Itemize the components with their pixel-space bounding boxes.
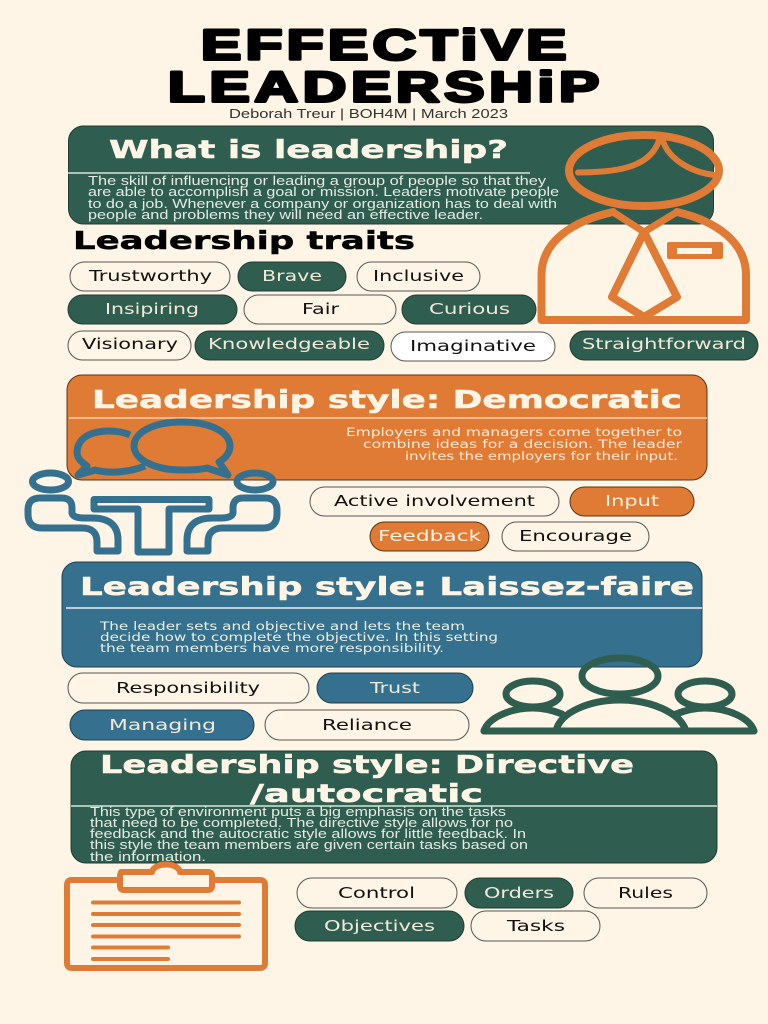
pill: Straightforward: Straightforward (582, 335, 746, 353)
text: democratic description: Employers and managers come together to (346, 425, 682, 439)
heading: laissez-faire: Leadership style: Laissez-faire (80, 572, 694, 601)
pill: Responsibility (68, 673, 309, 703)
pill: Control (297, 878, 457, 908)
pill: Knowledgeable: Knowledgeable (208, 335, 370, 353)
text: directive description: this style the team members are given certain tasks based on (90, 837, 528, 852)
text: directive description: the information. (90, 849, 206, 864)
heading: directive autocratic: /autocratic (250, 779, 483, 808)
text: leadership definition: people and problems they will need an effective leader. (88, 207, 483, 222)
text: democratic description (346, 425, 682, 463)
text: democratic description: invites the employers for their input. (405, 449, 678, 463)
pill: Trust (317, 673, 473, 703)
heading: what is leadership: What is leadership? (109, 135, 508, 164)
pill: Fair: Fair (302, 300, 340, 318)
pill: Objectives: Objectives (324, 917, 435, 935)
heading: directive autocratic (100, 750, 634, 808)
text: leadership definition: are able to accomplish a goal or mission. Leaders motivate people (88, 184, 559, 199)
pill: Imaginative (391, 332, 555, 361)
pill: Feedback: Feedback (378, 527, 481, 545)
pill: Tasks: Tasks (506, 917, 565, 935)
pill: Input: Input (605, 492, 659, 510)
text: directive description: feedback and the autocratic style allows for little feedback. In (90, 826, 526, 841)
heading: leadership traits: Leadership traits (73, 226, 415, 255)
text: leadership definition: to do a job. Whenever a company or organization has to deal with (88, 196, 557, 211)
heading: democratic: Leadership style: Democratic (92, 385, 682, 414)
pill: Brave (238, 262, 346, 291)
pill: Curious (402, 295, 536, 324)
pill: Inclusive (357, 262, 480, 291)
pill: Input (570, 487, 694, 516)
pills: leadership traits (68, 262, 758, 361)
text: laissez-faire description: The leader sets and objective and lets the team (99, 619, 465, 633)
pill: Objectives (295, 911, 464, 941)
pill: Brave: Brave (262, 267, 322, 285)
pill: Orders (465, 878, 573, 908)
icon: group of people (484, 658, 754, 731)
title (168, 22, 599, 111)
pill: Active involvement: Active involvement (334, 492, 535, 510)
pill: Orders: Orders (484, 884, 554, 902)
pill: Rules (584, 878, 707, 908)
icon: leader person (542, 135, 746, 320)
text: leadership definition (88, 173, 559, 222)
panel: directive autocratic (71, 750, 717, 864)
title: EFFECTiVE (201, 22, 566, 69)
pills: directive (295, 878, 707, 941)
pill: Encourage: Encourage (519, 527, 632, 545)
pill: Rules: Rules (618, 884, 673, 902)
pill: Inclusive: Inclusive (373, 267, 464, 285)
pill: Visionary: Visionary (82, 335, 178, 353)
text: laissez-faire description: decide how to complete the objective. In this setting (100, 630, 498, 644)
text: directive description: that need to be completed. The directive style allows for no (90, 815, 513, 830)
pill: Insipiring (68, 295, 237, 324)
text: laissez-faire description (99, 619, 498, 655)
text: laissez-faire description: the team members have more responsibility. (100, 641, 444, 655)
pill: Active involvement (310, 487, 559, 516)
pill: Trust: Trust (369, 679, 420, 697)
pill: Control: Control (338, 884, 415, 902)
pill: Managing (70, 710, 254, 740)
pill: Encourage (502, 522, 649, 551)
panel: what is leadership (68, 126, 714, 224)
text: democratic description: combine ideas for a decision. The leader (363, 437, 682, 451)
icon: team meeting (28, 473, 277, 552)
pill: Tasks (471, 911, 600, 941)
pill: Reliance (265, 710, 469, 740)
pill: Trustworthy: Trustworthy (88, 267, 212, 285)
subtitle: Deborah Treur | BOH4M | March 2023 (229, 107, 508, 121)
title: LEADERSHiP (168, 64, 599, 111)
pill: Knowledgeable (195, 331, 384, 360)
pill: Visionary (68, 331, 191, 360)
pill: Imaginative: Imaginative (410, 337, 536, 355)
pill: Responsibility: Responsibility (116, 679, 260, 697)
heading: directive autocratic: Leadership style: Directive (100, 750, 634, 779)
text: directive description (90, 804, 528, 864)
panel: democratic (67, 375, 707, 480)
pill: Trustworthy (70, 262, 230, 291)
pill: Reliance: Reliance (322, 716, 412, 734)
pill: Fair (244, 295, 396, 324)
icon: clipboard (67, 864, 265, 968)
pills: laissez-faire (68, 673, 473, 740)
pill: Insipiring: Insipiring (105, 300, 199, 318)
icon: speech bubbles (77, 422, 230, 475)
pill: Curious: Curious (429, 300, 510, 318)
text: directive description: This type of environment puts a big emphasis on the tasks (90, 804, 506, 819)
panel: laissez-faire (62, 562, 702, 667)
pill: Managing: Managing (109, 716, 216, 734)
pill: Straightforward (570, 331, 758, 360)
pills: democratic (310, 487, 694, 551)
pill: Feedback (370, 522, 489, 551)
text: leadership definition: The skill of influencing or leading a group of people so that they (88, 173, 547, 188)
